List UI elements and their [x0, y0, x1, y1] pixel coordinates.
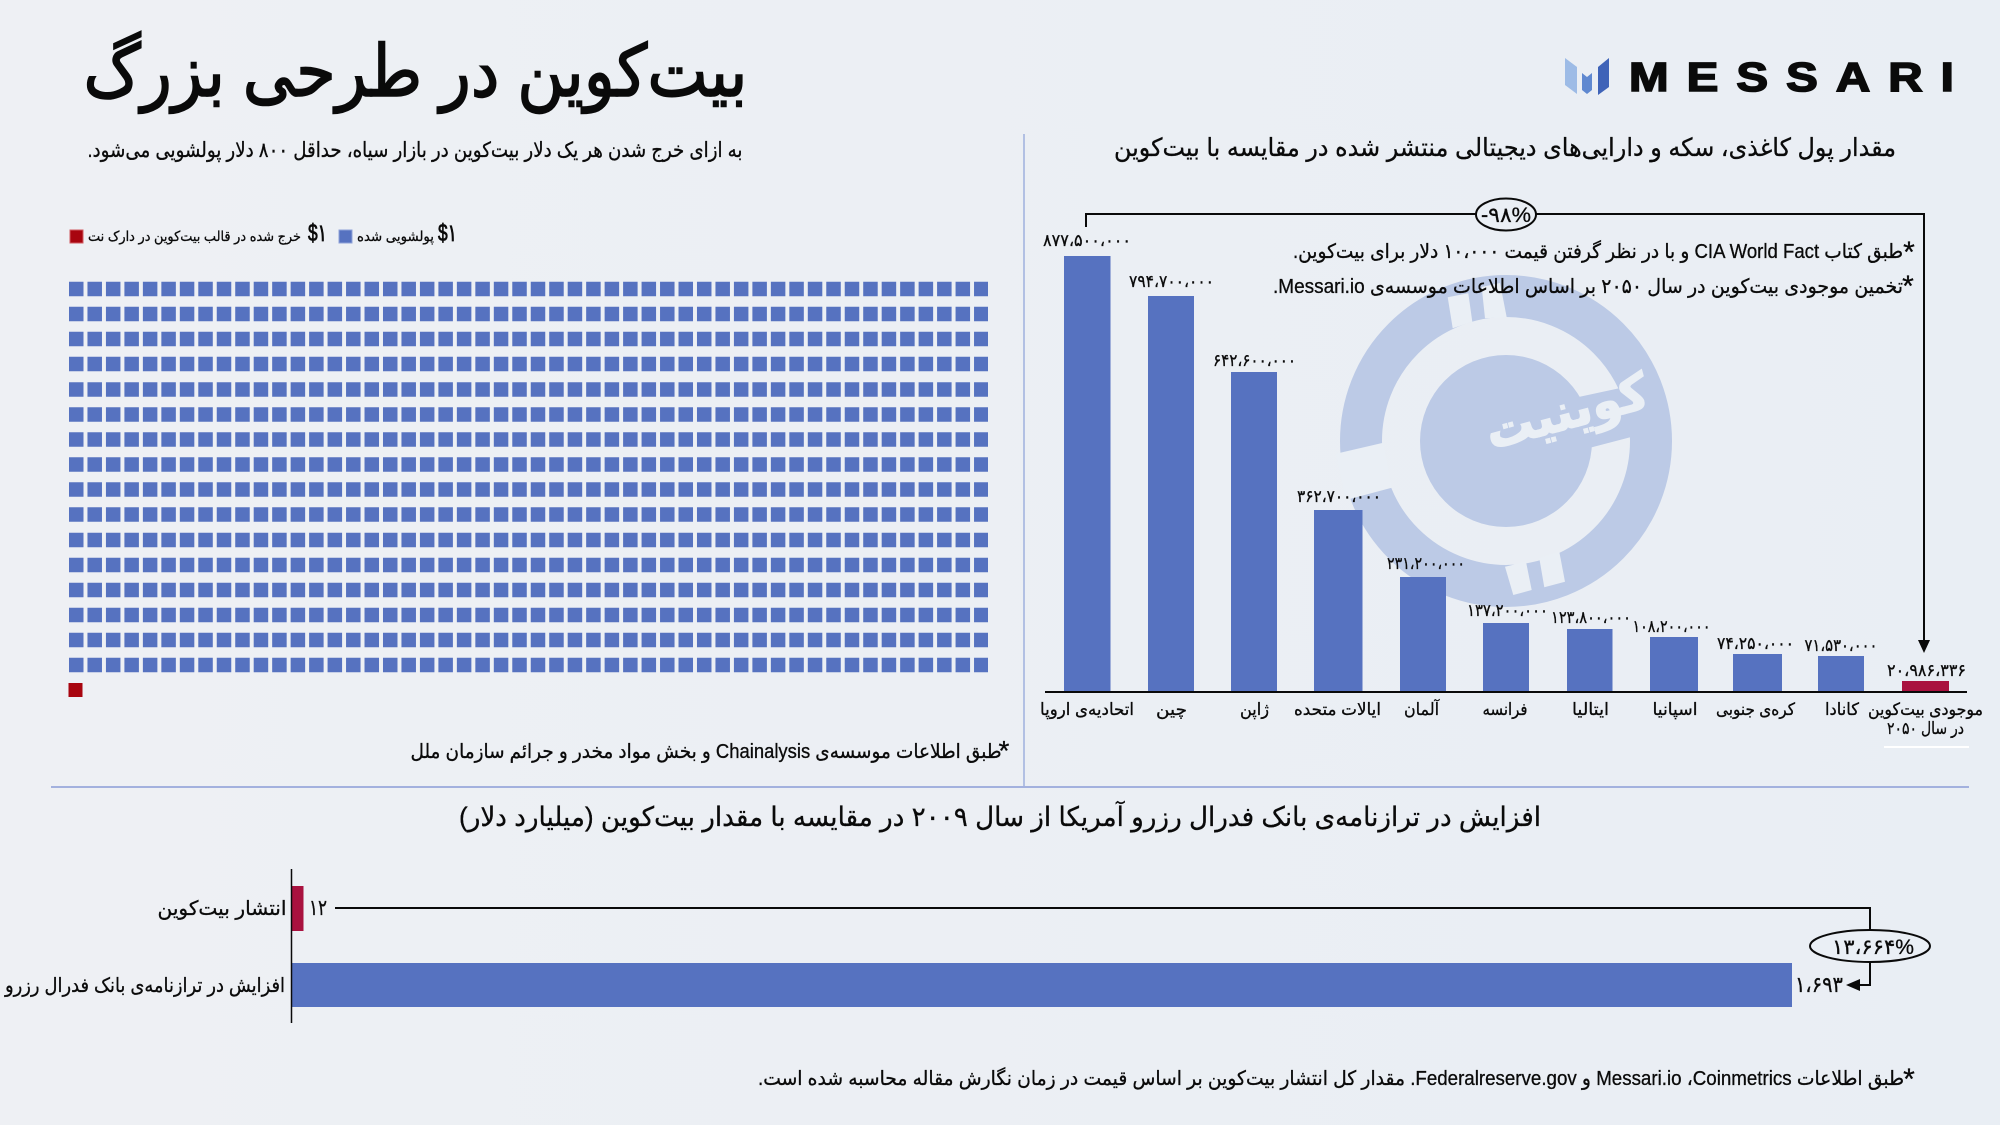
legend: laundered dollar	[339, 220, 457, 247]
note: CIA World Fact source: *	[1903, 236, 1915, 269]
bar values: ۶۴۲،۶۰۰،۰۰۰	[1213, 351, 1296, 370]
legend: dollar spent on the darknet: خرج شده در قالب بیت‌کوین در دارک نت	[88, 228, 301, 245]
bottom footnote: طبق اطلاعات Coinmetrics‏،‏ Messari.io و Federalreserve.gov‏. مقدار کل انتشار بیت‌کوین بر اساس قیمت در زمان نگارش مقاله محاسبه شده است.	[758, 1067, 1904, 1090]
note: Messari estimate: تخمین موجودی بیت‌کوین در سال ۲۰۵۰ بر اساس اطلاعات موسسه‌ی Messari.io.	[1273, 276, 1903, 298]
watermark: Coinnit logo: کوینیت	[1479, 363, 1655, 462]
note: CIA World Fact source: طبق کتاب CIA World Fact و با در نظر گرفتن قیمت ۱۰،۰۰۰ دلار برای بیت‌کوین.	[1293, 240, 1903, 263]
legend: laundered dollar: پولشویی شده	[357, 228, 434, 245]
left footnote: طبق اطلاعات موسسه‌ی Chainalysis و بخش مواد مخدر و جرائم سازمان ملل	[410, 741, 1001, 763]
legend	[70, 220, 457, 247]
bar values: ۲۰،۹۸۶،۳۳۶	[1887, 661, 1966, 680]
bar values: ۸۷۷،۵۰۰،۰۰۰	[1043, 231, 1131, 250]
category labels: آلمان	[1404, 698, 1440, 719]
bar values: ۷۴،۲۵۰،۰۰۰	[1717, 634, 1794, 653]
left subtitle: به ازای خرج شدن هر یک دلار بیت‌کوین در بازار سیاه، حداقل ۸۰۰ دلار پولشویی می‌شود.	[87, 139, 743, 163]
category labels: اتحادیه‌ی اروپا	[1040, 700, 1134, 720]
category labels: ایتالیا	[1572, 700, 1609, 719]
label: bitcoin issuance: انتشار بیت‌کوین	[158, 898, 286, 920]
category labels	[1040, 698, 1983, 738]
category labels: ایالات متحده	[1294, 700, 1381, 719]
category labels: ژاپن	[1240, 700, 1269, 720]
legend: dollar spent on the darknet	[70, 220, 327, 247]
bar values: ۱۲۳،۸۰۰،۰۰۰	[1551, 608, 1631, 627]
waffle chart: 800 laundered dollars per 1 darknet dollar	[69, 289, 988, 665]
category labels: موجودی بیت‌کوین	[1868, 700, 1983, 719]
category labels: اسپانیا	[1652, 700, 1698, 720]
note: Messari estimate	[1273, 270, 1914, 303]
title: بیت‌کوین در طرحی بزرگ	[84, 31, 748, 114]
bottom footnote: *	[1903, 1063, 1915, 1096]
note: CIA World Fact source	[1293, 236, 1915, 269]
bars	[1064, 256, 1949, 692]
bracket arrow: minus 98 percent	[1086, 198, 1930, 653]
legend: dollar spent on the darknet: $۱	[308, 220, 327, 247]
value: 12: ۱۲	[309, 895, 327, 920]
label: Fed balance sheet increase: افزایش در ترازنامه‌ی بانک فدرال رزرو	[4, 975, 285, 997]
logo: Messari	[1565, 55, 1954, 100]
bar values: ۷۹۴،۷۰۰،۰۰۰	[1129, 272, 1214, 291]
bar chart: Fed balance sheet vs bitcoin	[4, 869, 1843, 1023]
bar values	[1043, 231, 1966, 680]
bracket arrow: 13,664 percent	[335, 908, 1930, 991]
waffle chart: single darknet dollar	[68, 683, 82, 697]
bar values: ۷۱،۵۳۰،۰۰۰	[1804, 636, 1878, 655]
bar chart: money supply vs bitcoin	[1040, 231, 1983, 738]
bracket arrow: 13,664 percent: ۱۳،۶۶۴%	[1832, 936, 1914, 959]
watermark: Coinnit logo	[1336, 283, 1655, 595]
bottom footnote	[758, 1063, 1915, 1096]
category labels: کانادا	[1825, 700, 1860, 719]
value: 1693: ۱،۶۹۳	[1795, 972, 1843, 997]
bar values: ۱۳۷،۲۰۰،۰۰۰	[1467, 601, 1548, 620]
category labels: در سال ۲۰۵۰	[1887, 719, 1964, 738]
wordmark: MESSARI	[1629, 55, 1954, 100]
bottom chart title: افزایش در ترازنامه‌ی بانک فدرال رزرو آمریکا از سال ۲۰۰۹ در مقایسه با مقدار بیت‌کوین (میلیارد دلار)	[459, 801, 1541, 833]
category labels: فرانسه	[1482, 700, 1528, 719]
icon: Messari mark	[1565, 58, 1609, 95]
bar values: ۱۰۸،۲۰۰،۰۰۰	[1632, 617, 1710, 636]
category labels: کره‌ی جنوبی	[1716, 700, 1796, 719]
bracket arrow: minus 98 percent: -۹۸%	[1481, 204, 1531, 227]
note: Messari estimate: *	[1902, 270, 1914, 303]
right panel title: مقدار پول کاغذی، سکه و دارایی‌های دیجیتالی منتشر شده در مقایسه با بیت‌کوین	[1114, 134, 1896, 163]
bar values: ۲۳۱،۲۰۰،۰۰۰	[1387, 554, 1465, 573]
left footnote: *	[999, 735, 1010, 766]
bar values: ۳۶۲،۷۰۰،۰۰۰	[1297, 487, 1381, 506]
category labels: چین	[1156, 700, 1187, 720]
legend: laundered dollar: $۱	[438, 220, 457, 247]
